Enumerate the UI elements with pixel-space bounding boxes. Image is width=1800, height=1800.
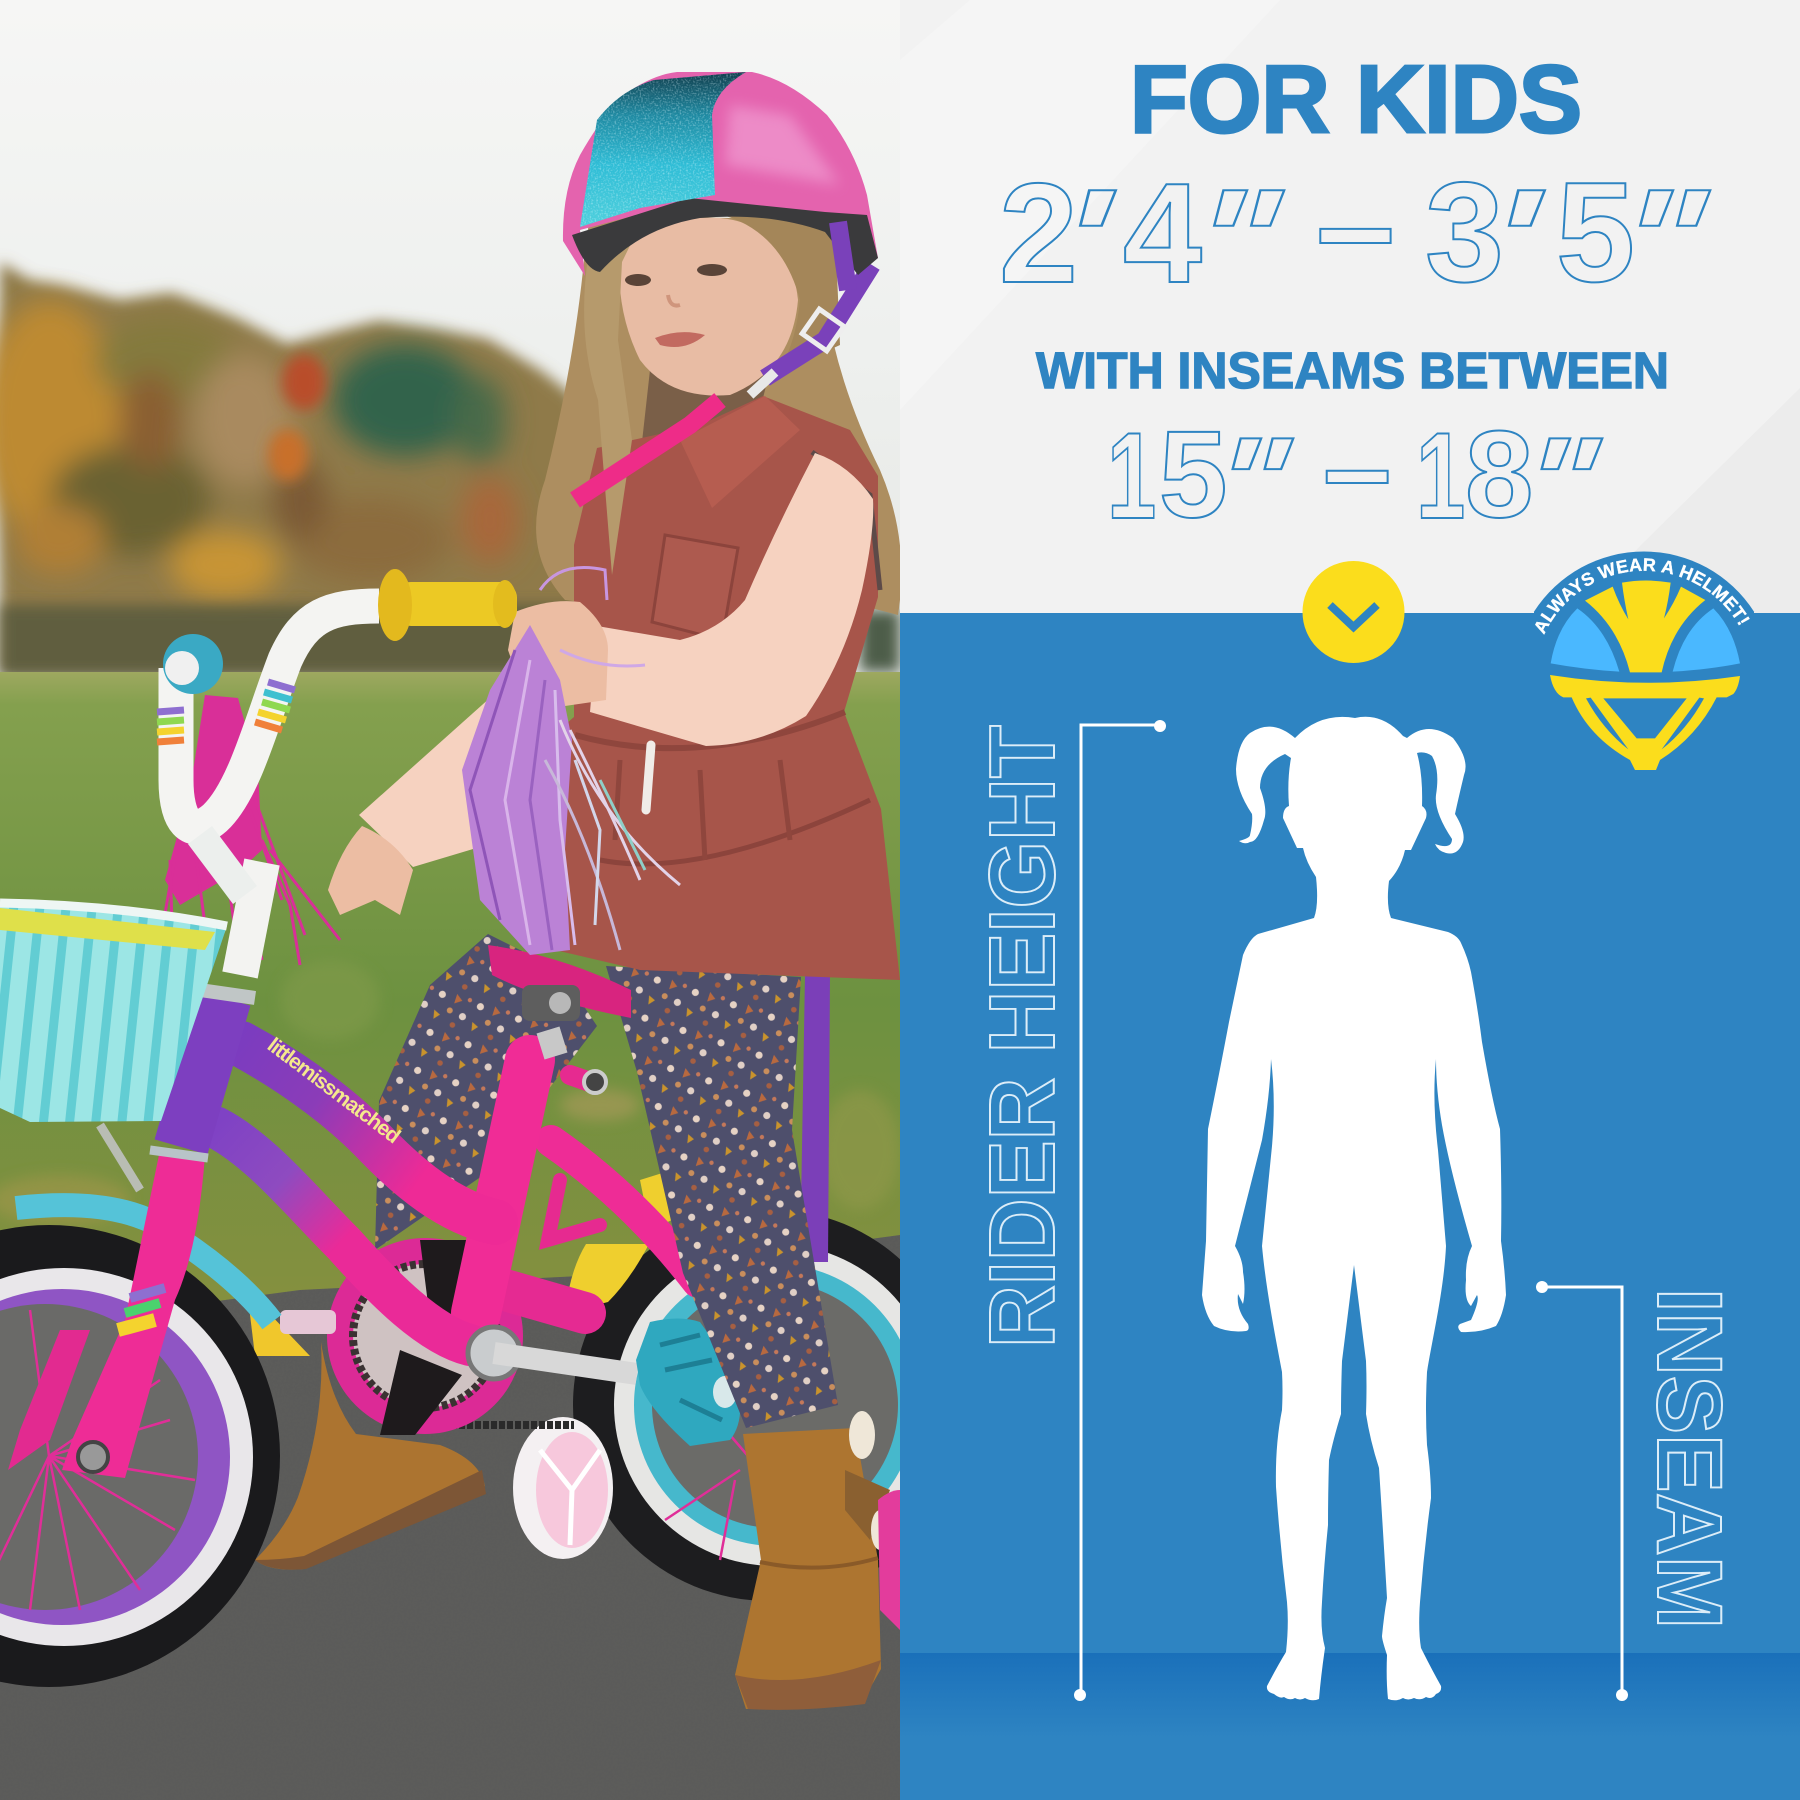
- face: [619, 218, 798, 396]
- vest: [540, 396, 900, 980]
- height range: 2: [999, 154, 1078, 313]
- inseam measure line: [1536, 1281, 1628, 1701]
- drawstring: [646, 745, 651, 810]
- inseam range: ": [1503, 412, 1621, 550]
- badge arc text: ALWAYS WEAR A HELMET!: [1535, 558, 1750, 635]
- helmet side strap: [838, 222, 848, 290]
- bike decal text: littlemissmatched: [263, 1034, 405, 1148]
- autumn tree line: [0, 262, 900, 677]
- left legging: [375, 934, 597, 1250]
- rider height measure line: [1074, 720, 1166, 1701]
- inseam range: 5: [1159, 407, 1227, 544]
- training wheel: [513, 1417, 613, 1559]
- inseam range: 1: [1416, 407, 1465, 544]
- fork: [8, 990, 255, 1478]
- subheading: with inseams between: WITH INSEAMS BETWEEN: [1036, 342, 1669, 399]
- right pedal: [636, 1318, 740, 1446]
- handlebar rainbow stickers: [157, 682, 295, 742]
- right boot: [735, 1411, 890, 1710]
- front fender: [16, 1205, 272, 1322]
- height range: ": [1596, 160, 1732, 318]
- left hand: [328, 826, 413, 915]
- left boot: [255, 1342, 486, 1570]
- inseam label: INSEAM: [1638, 1288, 1740, 1629]
- height range: ': [1037, 160, 1136, 319]
- helmet: [563, 70, 878, 276]
- blue lower panel: [900, 613, 1800, 1800]
- bike seat: [488, 945, 631, 1018]
- facial features: [625, 264, 727, 347]
- bike frame: [181, 998, 698, 1345]
- hair over forehead right: [710, 212, 840, 375]
- seat clamp: [522, 985, 580, 1021]
- height range: ": [1170, 160, 1306, 318]
- front hair strand: [584, 225, 640, 575]
- chin straps: [575, 265, 872, 500]
- chain: [456, 1421, 574, 1429]
- hair behind: [536, 215, 901, 615]
- inseam range: 1: [1107, 407, 1156, 544]
- inseam range: [1107, 400, 1621, 550]
- height range: –: [1316, 146, 1395, 305]
- height range: 4: [1123, 154, 1202, 313]
- basket: [0, 903, 227, 1190]
- inseam range: 8: [1465, 407, 1533, 544]
- purple streamers: [462, 568, 680, 955]
- rider height label: RIDER HEIGHT: [970, 725, 1074, 1348]
- pink item at edge: [878, 1490, 900, 1630]
- chainring: [327, 1238, 523, 1435]
- asphalt road: [0, 1230, 900, 1800]
- heading: for kids: FOR KIDS: [1130, 46, 1582, 153]
- handlebar grip: [378, 569, 517, 641]
- inseam range: ": [1194, 412, 1312, 550]
- panel: size information: [900, 0, 1800, 1800]
- photo: girl on pink bike: [0, 0, 965, 1800]
- height range: [999, 146, 1732, 319]
- left pedal: [250, 1310, 336, 1356]
- purple seat strut: [800, 975, 830, 1262]
- floor band: [900, 1653, 1800, 1738]
- front fork rainbow sticker: [118, 1288, 165, 1330]
- handlebar: [163, 606, 379, 895]
- front wheel: [0, 1225, 280, 1687]
- rear yellow fender: [570, 1174, 671, 1304]
- grass: [0, 672, 900, 1332]
- child silhouette: [1202, 717, 1506, 1700]
- neck: [640, 370, 770, 460]
- height range: 3: [1425, 153, 1504, 312]
- handlebar stem: [240, 862, 262, 975]
- right legging: [606, 966, 838, 1428]
- pink tassel: [162, 695, 340, 965]
- right hand: [508, 601, 608, 706]
- right sleeve: [590, 453, 873, 746]
- yellow chevron badge: [1302, 561, 1404, 663]
- helmet badge: [1534, 552, 1754, 770]
- hub and crank: [468, 1327, 637, 1379]
- height range: 5: [1556, 153, 1635, 312]
- height range: ': [1466, 160, 1565, 319]
- left sleeve: [359, 680, 565, 867]
- rear wheel: [573, 1218, 900, 1600]
- inseam range: –: [1323, 400, 1391, 537]
